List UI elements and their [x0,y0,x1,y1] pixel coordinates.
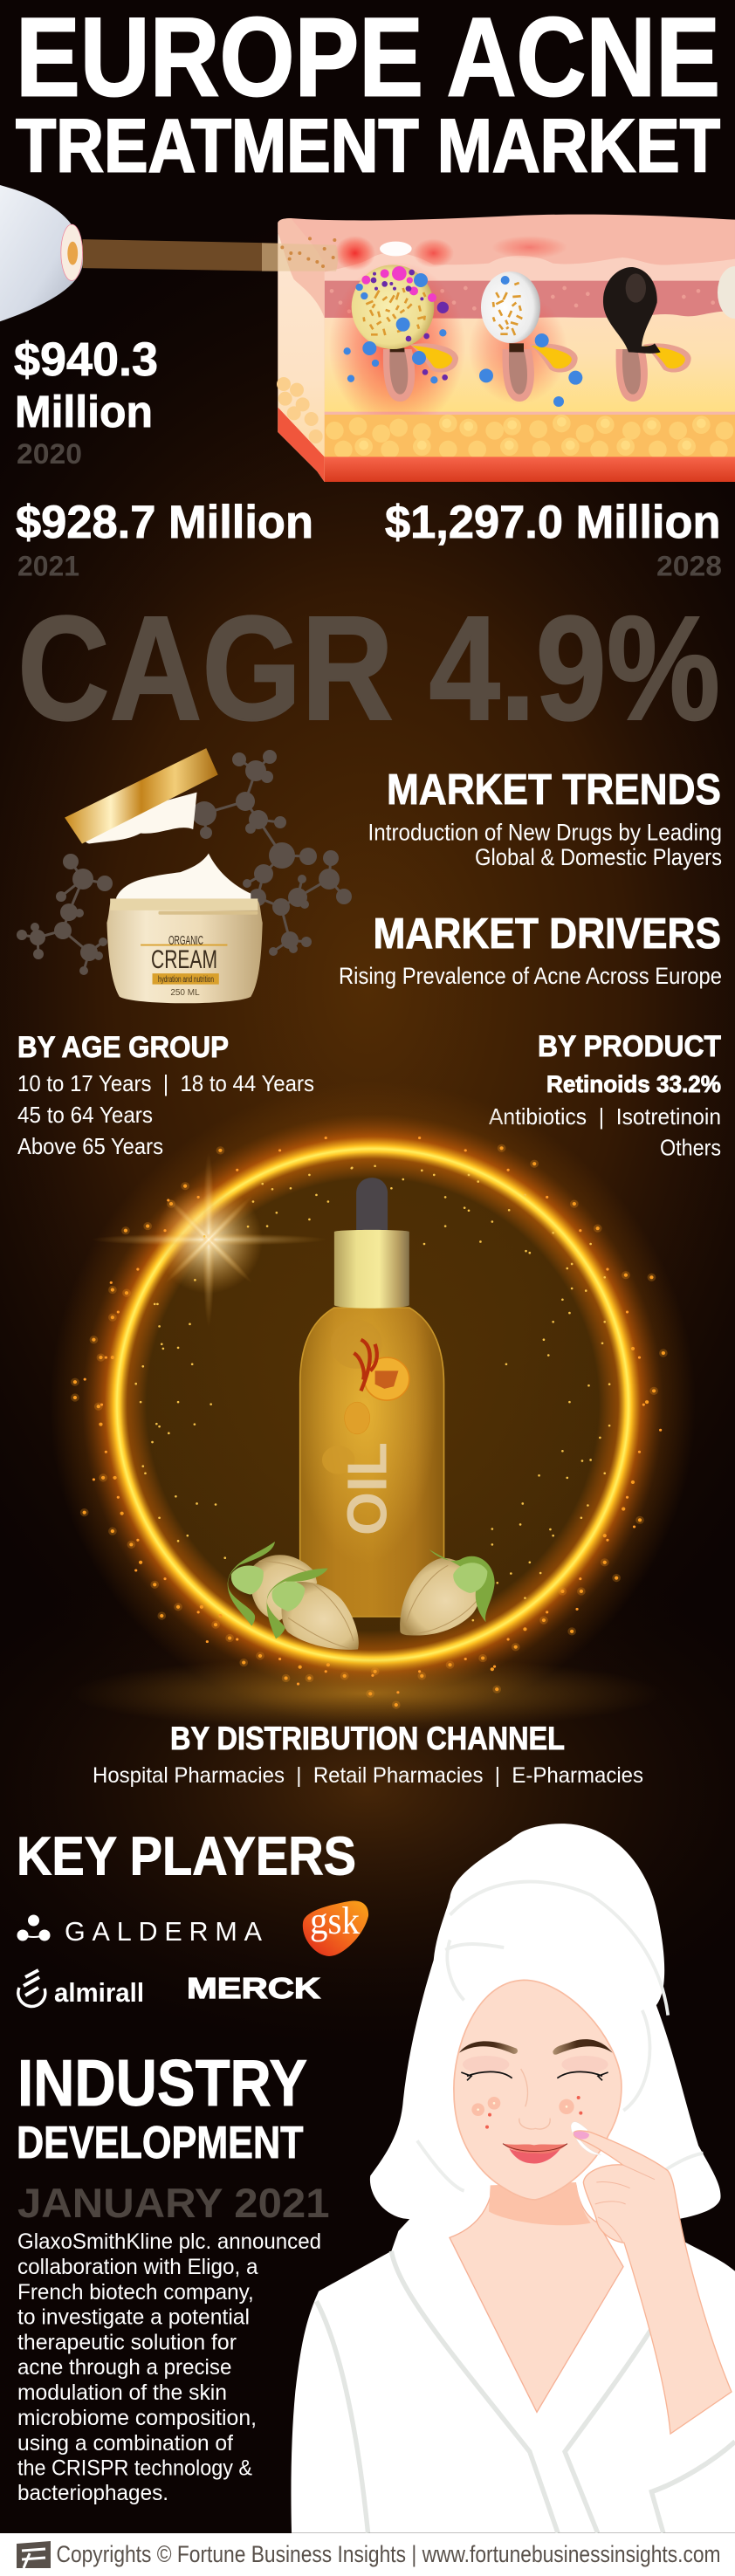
by age group [17,1031,314,1159]
stat: 2021 market size: $928.7 Million [16,497,313,548]
lesion: whitehead [481,271,582,407]
by product [489,1030,721,1161]
title [16,0,720,189]
stat: 2028 market size: 2028 [656,550,722,581]
stat: 2020 market size: $940.3 [14,333,158,386]
inflammation glows [329,262,465,430]
icon: cream jar [65,748,263,1003]
stat: 2020 market size: 2020 [17,438,82,470]
lesion: blackhead [603,267,661,354]
lesion: pustule [347,264,486,380]
icon: cream jar: 250 ML [170,988,200,998]
by product: BY PRODUCT [538,1030,721,1063]
fat layer [325,415,735,458]
sparkle flare [91,1152,326,1327]
body text: GlaxoSmithKline plc. announced [17,2229,321,2254]
by distribution channel: Hospital Pharmacies | Retail Pharmacies | E-Pharmacies [93,1763,643,1788]
brows and eyes [459,2041,518,2054]
by distribution channel: BY DISTRIBUTION CHANNEL [170,1721,565,1756]
stat: 2021 market size: 2021 [17,550,79,581]
body text: using a combination of [17,2431,233,2456]
hand and arm [574,2131,732,2434]
icon: cream jar: CREAM [151,945,217,974]
logo: GSK [303,1899,368,1956]
icon: cream jar: ORGANIC [168,933,203,948]
nose [519,2069,550,2129]
body text: to investigate a potential [17,2305,250,2330]
industry development heading: DEVELOPMENT [17,2118,304,2168]
icon: Fortune Business Insights logo [17,2541,51,2568]
logo: Almirall [18,1970,144,2008]
icon: molecule network [17,750,352,975]
footer [0,2533,735,2576]
logo: Galderma: GALDERMA [65,1917,263,1947]
body text: collaboration with Eligo, a [17,2255,258,2279]
stat: 2021 market size [16,497,313,581]
body text: therapeutic solution for [17,2330,237,2354]
by product: Retinoids 33.2% [546,1071,721,1097]
key players heading: KEY PLAYERS [17,1826,356,1887]
stat: 2020 market size [14,333,158,470]
body text: acne through a precise [17,2355,231,2380]
by product: Others [660,1135,721,1161]
stat: 2028 market size [385,497,722,581]
logo: Merck: MERCK [187,1972,320,2004]
illustration: glowing ring [50,1082,696,1730]
icon: jojoba seeds [228,1542,495,1650]
body text: French biotech company, [17,2280,254,2305]
market trends [368,766,722,870]
by age group: 45 to 64 Years [17,1102,153,1128]
cotton pad [571,2122,601,2155]
illustration: skin cross-section [262,215,735,482]
market drivers [339,910,722,989]
illustration: woman applying cream [291,1824,735,2533]
date: JANUARY 2021 [17,2180,330,2226]
by age group: Above 65 Years [17,1133,163,1159]
body text: the CRISPR technology & [17,2456,252,2481]
body text: microbiome composition, [17,2406,257,2430]
logo: GSK: gsk [310,1899,360,1942]
body text: modulation of the skin [17,2380,227,2405]
body text: bacteriophages. [17,2481,168,2505]
stat: 2020 market size: Million [15,387,153,436]
industry development heading [17,2046,307,2168]
chest [450,2185,623,2412]
industry development heading: INDUSTRY [17,2046,307,2119]
by product: Antibiotics | Isotretinoin [489,1103,721,1130]
icon: oil bottle: OIL [335,1442,398,1535]
stat: 2028 market size: $1,297.0 Million [385,497,721,548]
laser beam on skin [262,238,338,271]
icon: laser device with beam [0,185,279,321]
by age group: 10 to 17 Years | 18 to 44 Years [17,1070,314,1096]
icon: cream jar: hydration and nutrition [158,975,214,985]
by distribution channel [93,1721,643,1788]
by age group: BY AGE GROUP [17,1031,229,1064]
lips [509,2148,561,2163]
left face [278,223,325,482]
icon: oil bottle [300,1178,444,1617]
logo: Almirall: almirall [54,1977,144,2008]
follicles and glands [383,343,458,402]
particles [75,1138,663,1705]
pimples [471,2103,484,2116]
body text [17,2229,321,2505]
